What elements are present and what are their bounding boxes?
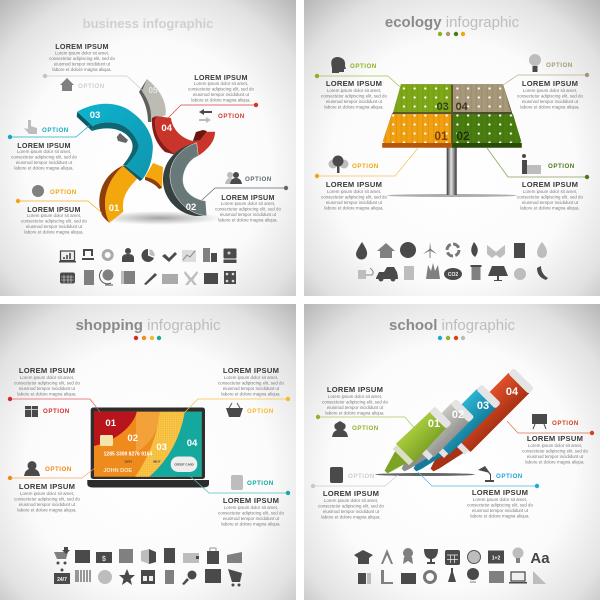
callout: red gift: labore et dolore magna aliqua. (17, 392, 77, 396)
icon: bulb (512, 548, 524, 563)
icon: apple (514, 268, 526, 280)
callout: tan option: OPTION (546, 62, 573, 69)
callout: top grey option: LOREM IPSUM (55, 42, 109, 51)
laptop with credit card: JOHN DOE (103, 468, 132, 474)
callout: green graduate: OPTION (352, 425, 379, 432)
title dots (438, 336, 465, 340)
callout: blue lamp: eiusmod tempor incididunt ut (472, 508, 529, 513)
callout: red option: labore et dolore magna aliqua. (191, 98, 251, 102)
callout: dark option: consectetur adipiscing elit, sed do (215, 206, 282, 212)
icon: award (403, 548, 413, 564)
icon: laptop (509, 572, 527, 584)
callout: yellow basket: eiusmod tempor incididunt ut (223, 386, 280, 391)
icon: graduate (332, 421, 348, 437)
icon: Aa: Aa (530, 550, 550, 567)
callout: yellow basket: labore et dolore magna aliqua. (221, 392, 281, 396)
title dots (438, 32, 465, 36)
icon: school bag (401, 573, 416, 584)
icon: globe (32, 185, 44, 197)
icon: pie (142, 249, 155, 262)
icon: shop (141, 570, 155, 584)
callout: teal option: OPTION (42, 127, 69, 134)
laptop with credit card: 10/14 (124, 460, 132, 464)
laptop with credit card: 02 (127, 433, 138, 444)
callout: teal tag: LOREM IPSUM (223, 496, 279, 505)
callout: grey notebook: eiusmod tempor incididunt ut (323, 509, 380, 514)
laptop with credit card: 04 (187, 438, 198, 449)
callout: dark green option: eiusmod tempor incididunt ut (522, 200, 579, 205)
callout: teal tag: eiusmod tempor incididunt ut (223, 516, 280, 521)
icon: discount clock (98, 570, 112, 584)
callout: top grey option: OPTION (78, 83, 105, 90)
callout: yellow option: Lorem ipsum dolor sit amet, (27, 213, 81, 218)
callout: dark option: Lorem ipsum dolor sit amet, (221, 201, 275, 206)
callout: dark option: labore et dolore magna aliqua. (218, 218, 278, 222)
callout: teal tag: Lorem ipsum dolor sit amet, (224, 505, 278, 510)
callout: dark green option: LOREM IPSUM (522, 180, 578, 189)
icon: blackboard (532, 414, 547, 429)
callout: yellow option: labore et dolore magna aliqua. (24, 230, 84, 234)
icon: star (119, 569, 135, 585)
callout: orange option: eiusmod tempor incididunt ut (326, 200, 383, 205)
callout: red gift: consectetur adipiscing elit, sed do (14, 380, 81, 386)
solar panel: 02 (456, 129, 470, 143)
icon: cash: $ (102, 556, 106, 563)
icon: 1+2 slate: 1+2 (492, 556, 500, 562)
icon: plug (358, 268, 373, 279)
icon: store (75, 550, 90, 563)
icon: mortarboard (354, 550, 373, 564)
callout: red board: labore et dolore magna aliqua. (525, 460, 585, 464)
3D arc chart: 05 (149, 86, 158, 95)
callout: tan option: consectetur adipiscing elit, sed do (517, 94, 584, 98)
icon: shopping bag (207, 548, 219, 564)
callout: red board: eiusmod tempor incididunt ut (527, 454, 584, 459)
callout: teal option: LOREM IPSUM (17, 141, 71, 150)
callout: top grey option: Lorem ipsum dolor sit amet, (55, 50, 109, 56)
four markers: 03 (477, 400, 489, 412)
callout: top grey option (43, 42, 142, 91)
callout: teal option: eiusmod tempor incididunt ut (16, 160, 73, 165)
four markers: 02 (452, 409, 464, 421)
callout: red option (168, 73, 258, 123)
callout: green option: consectetur adipiscing elit, sed do (321, 94, 388, 98)
title: ecology infographic: ecology infographic (385, 14, 520, 31)
icon: office (84, 270, 94, 285)
icon: calculator (165, 570, 174, 584)
icon: cart (54, 547, 70, 564)
icon rows: ecology (356, 242, 548, 282)
callout: top grey option: labore et dolore magna aliqua. (52, 67, 112, 72)
3D arc chart: 04 (161, 123, 173, 134)
icon: flame (537, 242, 547, 258)
callout: yellow option: consectetur adipiscing elit, sed do (21, 218, 88, 224)
callout: yellow option: LOREM IPSUM (27, 205, 81, 214)
callout: top grey option: consectetur adipiscing elit, sed do (49, 56, 116, 61)
3D arc chart: 01 (109, 203, 120, 214)
laptop with credit card: 03 (156, 442, 167, 453)
title: shopping infographic: shopping infographic (75, 317, 221, 334)
callout: dark green option: labore et dolore magna aliqua. (520, 206, 580, 210)
callout: blue lamp: consectetur adipiscing elit, sed do (467, 502, 534, 508)
title: school infographic: school infographic (389, 317, 515, 334)
icon: books (358, 573, 371, 584)
icon: gear (103, 250, 112, 260)
solar panel: 01 (434, 129, 448, 143)
callout: red option: Lorem ipsum dolor sit amet, (194, 81, 248, 86)
icon: CO2 cloud: CO2 (448, 272, 458, 278)
four markers: 04 (506, 386, 519, 398)
callout: dark option (202, 172, 288, 222)
laptop with credit card: 1285 3309 8276 9164 (104, 452, 153, 458)
callout: teal option: consectetur adipiscing elit, sed do (11, 154, 78, 160)
3D arc chart: 03 (90, 110, 100, 121)
callout: red option: consectetur adipiscing elit, sed do (188, 86, 255, 92)
icon: grass (426, 263, 440, 279)
callout: teal tag: consectetur adipiscing elit, sed do (218, 510, 285, 516)
callout: red gift: OPTION (43, 408, 70, 415)
callout: teal tag (190, 475, 290, 526)
solar panel: 04 (456, 101, 469, 113)
callout: orange person (8, 461, 95, 512)
icon: bus (489, 571, 504, 583)
icon: calculator (121, 271, 135, 284)
callout: teal option: Lorem ipsum dolor sit amet, (17, 149, 71, 154)
callout: grey notebook: OPTION (348, 473, 375, 480)
icon: buildings (203, 248, 217, 262)
four markers (375, 368, 534, 481)
callout: grey notebook: consectetur adipiscing elit, sed do (318, 504, 385, 508)
icon: grid of circles (224, 271, 236, 284)
callout: green option: labore et dolore magna aliqua. (324, 104, 384, 110)
3D arc chart: 02 (186, 202, 196, 213)
callout: yellow basket: consectetur adipiscing elit, sed do (218, 380, 285, 386)
icon: ticket (205, 569, 221, 583)
callout: green graduate: consectetur adipiscing elit, sed do (322, 400, 389, 404)
icon: battery (514, 243, 525, 258)
four markers: 01 (428, 418, 440, 430)
icon: CO2 cloud (444, 268, 462, 280)
icon: tree (328, 156, 348, 173)
icon: credit cards (227, 552, 242, 563)
icon: trophy (424, 549, 438, 564)
callout: tan option (503, 54, 589, 110)
callout: green graduate: Lorem ipsum dolor sit amet, (328, 394, 382, 399)
icon: leaf (471, 242, 478, 257)
icon: basket (226, 403, 243, 417)
callout: red board: consectetur adipiscing elit, sed do (522, 448, 589, 454)
icon: 1+2 slate (488, 550, 504, 564)
icon: atom (424, 572, 436, 582)
callout: orange person: OPTION (45, 466, 72, 473)
callout: orange option: labore et dolore magna aliqua. (324, 206, 384, 210)
solar panel: 03 (437, 101, 449, 113)
callout: grey notebook: Lorem ipsum dolor sit amet, (324, 498, 378, 503)
icon: factory (522, 154, 541, 174)
callout: yellow basket (185, 366, 290, 417)
icon: solar panel (488, 266, 508, 281)
callout: orange person: LOREM IPSUM (19, 482, 75, 491)
callout: orange person: eiusmod tempor incididunt ut (19, 502, 76, 507)
callout: orange option: consectetur adipiscing elit, sed do (321, 194, 388, 200)
icon rows: school (354, 548, 550, 584)
3D arc chart (77, 79, 222, 225)
callout: yellow basket: LOREM IPSUM (223, 366, 279, 375)
callout: dark option: OPTION (245, 176, 272, 183)
icon: truck (119, 549, 133, 563)
icon: magnifier (182, 570, 196, 585)
icon: people (225, 172, 242, 184)
callout: green graduate: labore et dolore magna aliqua. (325, 410, 385, 416)
laptop with credit card (87, 408, 209, 488)
icon: butterfly (487, 245, 505, 258)
callout: teal option: labore et dolore magna aliqua. (14, 166, 74, 170)
callout: red board (507, 414, 594, 464)
panel: business infographic (0, 0, 296, 296)
callout: dark option: LOREM IPSUM (221, 193, 275, 202)
callout: green option (315, 57, 400, 110)
callout: top grey option: eiusmod tempor incididunt ut (54, 62, 111, 66)
laptop with credit card: 06/17 (153, 460, 161, 464)
callout: green option: Lorem ipsum dolor sit amet, (327, 88, 381, 93)
icon: recycle (447, 244, 459, 256)
callout: red gift (8, 366, 100, 417)
icon: earth (400, 242, 416, 258)
callout: grey notebook (311, 467, 398, 520)
icon: alarm clock (468, 550, 480, 564)
callout: yellow option (16, 185, 102, 234)
icon: globe stand (100, 270, 114, 285)
callout: tan option: LOREM IPSUM (522, 79, 578, 88)
callout: dark green option: OPTION (548, 163, 575, 170)
icon: house (60, 78, 74, 91)
callout: yellow option: eiusmod tempor incididunt ut (26, 224, 83, 229)
icon: wallet (183, 553, 199, 563)
icon: person (122, 248, 134, 262)
icon: 24/7: 24/7 (57, 577, 67, 583)
icon: 24/7 (54, 568, 70, 584)
laptop with credit card: 01 (105, 418, 117, 429)
title: business infographic: business infographic (83, 16, 213, 31)
callout: green option: LOREM IPSUM (326, 79, 382, 88)
callout: green option: eiusmod tempor incididunt ut (326, 99, 383, 104)
icon: cash (96, 552, 112, 563)
callout: orange option: Lorem ipsum dolor sit amet, (327, 189, 381, 194)
callout: blue lamp: LOREM IPSUM (472, 488, 528, 497)
callout: dark green option: consectetur adipiscing elit, sed do (517, 194, 584, 200)
panel: ecology infographic (304, 0, 600, 296)
icon: notebook (330, 467, 343, 483)
callout: green graduate: LOREM IPSUM (327, 385, 383, 394)
callout: dark green option: Lorem ipsum dolor sit amet, (523, 189, 577, 194)
icon: lock (82, 249, 94, 260)
callout: orange option (315, 148, 418, 210)
callout: red option: eiusmod tempor incididunt ut (193, 92, 250, 97)
icon: head (331, 57, 346, 73)
icon: laptop chart (59, 251, 76, 262)
callout: green option: OPTION (350, 63, 377, 70)
callout: yellow basket: OPTION (247, 408, 274, 415)
callout: tan option: Lorem ipsum dolor sit amet, (523, 88, 577, 93)
icon rows: business (59, 248, 236, 285)
callout: yellow option: OPTION (50, 189, 77, 196)
icon: line graph (182, 250, 196, 262)
icon: arrows (199, 109, 212, 123)
icon: lamp (478, 466, 494, 482)
callout: orange person: consectetur adipiscing elit, sed do (14, 496, 81, 502)
icon: pen (144, 273, 157, 285)
icon: phone (537, 266, 548, 280)
icon: bag (404, 266, 414, 280)
callout: red option: OPTION (218, 113, 245, 120)
icon rows: shopping (54, 547, 242, 586)
callout: dark green option (487, 148, 589, 210)
icon: check (162, 252, 177, 262)
callout: blue lamp: OPTION (496, 473, 523, 480)
callout: red gift: eiusmod tempor incididunt ut (19, 386, 76, 391)
icon: pencil ruler (381, 570, 393, 584)
callout: blue lamp: Lorem ipsum dolor sit amet, (473, 497, 527, 502)
icon: set square (533, 571, 546, 584)
icon: bell (448, 568, 456, 582)
callout: green graduate (316, 385, 416, 437)
callout: teal tag: labore et dolore magna aliqua. (221, 522, 281, 526)
callout: orange person: Lorem ipsum dolor sit amet, (20, 491, 74, 496)
icon: barcode (76, 570, 90, 582)
callout: yellow basket: Lorem ipsum dolor sit amet, (224, 375, 278, 380)
icon: home (377, 243, 395, 258)
icon: monitor (224, 248, 236, 263)
icon: device (162, 274, 178, 284)
callout: orange option: LOREM IPSUM (326, 180, 382, 189)
callout: red board: LOREM IPSUM (527, 434, 583, 443)
icon: wind turbine (423, 242, 437, 258)
icon: hand (24, 120, 37, 134)
icon: briefcase (204, 273, 218, 284)
icon: car (376, 267, 398, 282)
icon: man (24, 461, 40, 476)
callout: blue lamp (418, 466, 539, 518)
icon: gift (25, 406, 38, 417)
icon: trash (470, 265, 482, 280)
icon: calculator (445, 550, 460, 565)
callout: dark option: eiusmod tempor incididunt ut (220, 212, 277, 217)
callout: green graduate: eiusmod tempor incididunt ut (327, 405, 384, 410)
callout: red board: OPTION (552, 420, 579, 427)
icon: cart full (228, 569, 242, 586)
callout: orange option: OPTION (352, 163, 379, 170)
callout: teal option (8, 120, 90, 170)
panel: school infographic (304, 304, 600, 600)
callout: tan option: eiusmod tempor incididunt ut (522, 99, 579, 104)
callout: teal tag: OPTION (247, 480, 274, 487)
callout: red board: Lorem ipsum dolor sit amet, (528, 443, 582, 448)
panel: shopping infographic (0, 304, 296, 600)
icon: globe (467, 568, 479, 583)
callout: red gift: Lorem ipsum dolor sit amet, (20, 375, 74, 380)
icon: scissors (184, 271, 198, 285)
callout: blue lamp: labore et dolore magna aliqua. (470, 514, 530, 518)
laptop with credit card: CREDIT CARD (174, 462, 194, 466)
title dots (134, 336, 161, 340)
icon: shop sign (164, 548, 175, 563)
callout: tan option: labore et dolore magna aliqua. (520, 104, 580, 110)
icon: drop (356, 242, 367, 260)
icon: calendar (60, 272, 75, 284)
icon: tag (231, 475, 243, 490)
callout: grey notebook: LOREM IPSUM (323, 489, 379, 498)
callout: red gift: LOREM IPSUM (19, 366, 75, 375)
icon: bulb (529, 54, 541, 72)
callout: orange person: labore et dolore magna aliqua. (17, 508, 77, 512)
solar panel (382, 84, 522, 197)
callout: grey notebook: labore et dolore magna aliqua. (321, 514, 381, 520)
icon: compass (381, 549, 393, 564)
callout: red option: LOREM IPSUM (194, 73, 248, 82)
icon: box (141, 549, 156, 564)
